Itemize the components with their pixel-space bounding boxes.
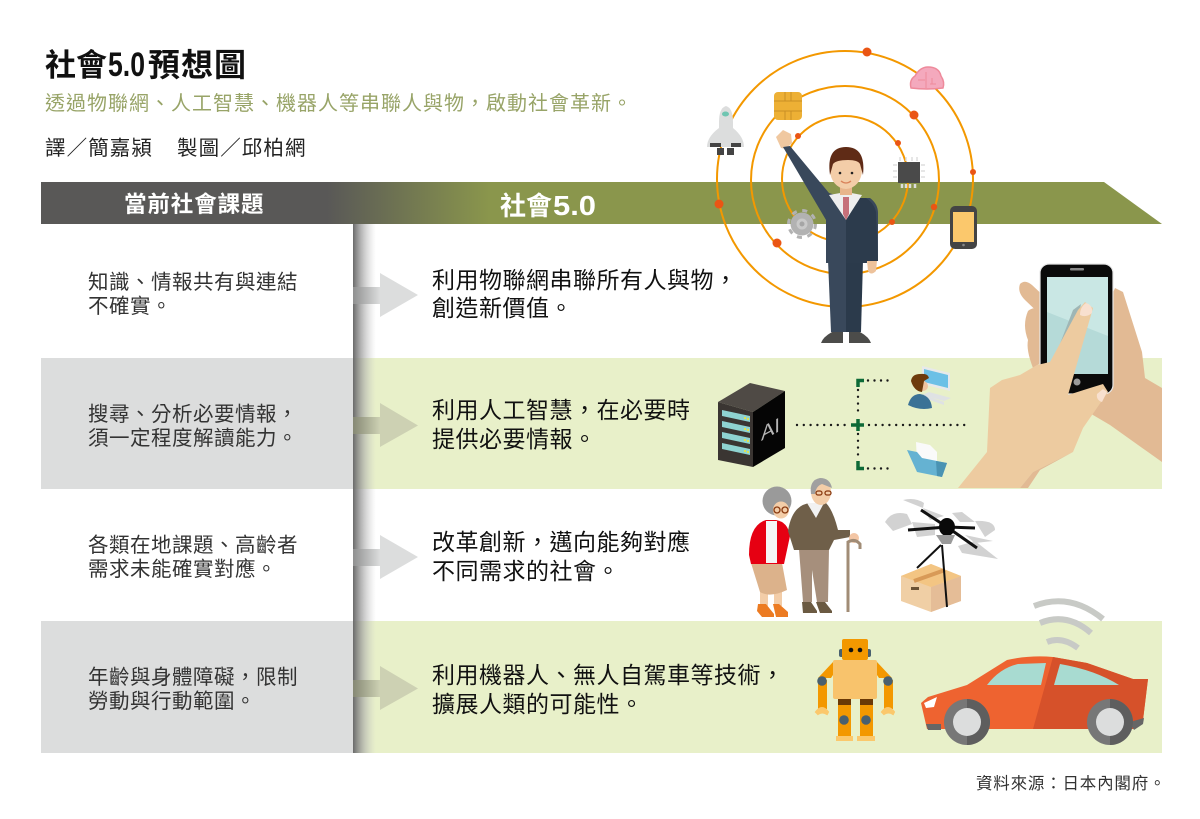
- heading: society 5.0: 社會: [500, 186, 552, 223]
- shirt and tie: [829, 192, 862, 220]
- text: issue 3: 各類在地課題、高齡者: [88, 528, 298, 558]
- robot torso: [833, 660, 877, 699]
- text: solution 2: 提供必要情報。: [432, 420, 596, 454]
- icon: space shuttle: [707, 106, 744, 155]
- icon: processor: [893, 157, 925, 188]
- robot arms: [818, 662, 892, 678]
- panel: row backgrounds: [41, 224, 1162, 753]
- text: issue 3: 需求未能確實對應。: [88, 552, 277, 582]
- woman head: [762, 486, 792, 518]
- credits: 製圖／邱柏網: [177, 131, 307, 161]
- illustration: delivery drone: [885, 499, 998, 612]
- icon: gear: [788, 210, 816, 238]
- label: AI: AI: [761, 413, 780, 446]
- windows: [987, 663, 1046, 685]
- icon: person at computer: [908, 366, 951, 409]
- source note: 資料來源：日本內閣府。: [976, 770, 1166, 794]
- arrow: row 3: [353, 535, 418, 579]
- connector dots: [797, 380, 968, 468]
- text: issue 2: 搜尋、分析必要情報，: [88, 397, 298, 427]
- text: solution 4: 擴展人類的可能性。: [432, 685, 644, 719]
- back fingers: [1019, 282, 1048, 368]
- robot ears: [839, 649, 871, 657]
- finger shadow: [1053, 304, 1081, 362]
- man legs: [799, 549, 829, 602]
- front hand: [958, 302, 1108, 488]
- woman legs: [760, 590, 782, 606]
- title: [45, 40, 247, 86]
- wrist shade: [1020, 452, 1073, 488]
- phone screen: [1047, 277, 1108, 374]
- face: [839, 172, 853, 183]
- arrow: row 2: [353, 403, 418, 447]
- heading: society 5.0: [500, 186, 596, 223]
- neck: [840, 184, 852, 195]
- car body: [921, 656, 1148, 729]
- subtitle: 透過物聯網、人工智慧、機器人等串聯人與物，啟動社會革新。: [45, 87, 633, 116]
- text: solution 1: 利用物聯網串聯所有人與物，: [432, 261, 738, 295]
- icon: smartphone: [950, 206, 977, 249]
- jacket: [783, 146, 878, 263]
- illustration: self-driving car: [921, 656, 1148, 745]
- credits: [45, 131, 307, 161]
- text: issue 4: 勞動與行動範圍。: [88, 684, 256, 714]
- hair: [829, 147, 863, 175]
- robot legs: [838, 699, 851, 736]
- header band: [41, 182, 1162, 224]
- arrow: row 4: [353, 666, 418, 710]
- icon: brain: [910, 67, 944, 89]
- tether: [917, 545, 947, 607]
- arrow: row 1: [353, 273, 418, 317]
- man head: [811, 479, 831, 505]
- text: solution 4: 利用機器人、無人自駕車等技術，: [432, 656, 784, 690]
- shoes: [821, 332, 843, 343]
- woman skirt: [751, 563, 787, 595]
- icon: folder: [907, 442, 947, 477]
- illustration: AI server: [718, 383, 785, 467]
- illustration: businessman: [776, 130, 878, 343]
- back hand: [1068, 288, 1162, 462]
- title: 預想圖: [148, 40, 247, 86]
- illustration: hands holding phone: [958, 264, 1162, 488]
- title: 社會: [45, 40, 107, 85]
- icon: chip card: [774, 92, 802, 120]
- man shoes: [802, 602, 832, 613]
- title: 5.0: [108, 46, 145, 84]
- illustration: elderly couple: [749, 478, 860, 617]
- text: issue 2: 須一定程度解讀能力。: [88, 421, 298, 451]
- rotors: [885, 499, 998, 559]
- text: issue 1: 不確實。: [88, 289, 172, 319]
- raised fist: [776, 130, 792, 149]
- man sweater: [788, 503, 850, 550]
- text: solution 3: 不同需求的社會。: [432, 552, 620, 586]
- heading: current issues: 當前社會課題: [124, 187, 264, 219]
- text: solution 2: 利用人工智慧，在必要時: [432, 391, 690, 425]
- right hand: [867, 261, 877, 274]
- drone arms: [908, 510, 977, 548]
- text: issue 4: 年齡與身體障礙，限制: [88, 660, 298, 690]
- phone body: [1040, 264, 1113, 394]
- icon: wifi signal: [1034, 601, 1103, 648]
- robot head: [842, 639, 868, 660]
- woman torso: [749, 520, 790, 564]
- legs: [828, 260, 846, 332]
- text: solution 1: 創造新價值。: [432, 289, 573, 323]
- drone body: [939, 518, 955, 536]
- illustration: robot: [816, 639, 894, 741]
- woman shoes: [757, 604, 788, 617]
- wheels: [944, 699, 1133, 745]
- headlight: [924, 697, 937, 708]
- heading: society 5.0: 5.0: [553, 190, 596, 221]
- parcel: [901, 564, 961, 612]
- text: issue 1: 知識、情報共有與連結: [88, 265, 298, 295]
- head: [830, 151, 862, 189]
- text: solution 3: 改革創新，邁向能夠對應: [432, 523, 690, 557]
- cane: [848, 540, 860, 612]
- orbit diagram: [714, 48, 976, 307]
- credits: 譯／簡嘉潁: [45, 131, 153, 161]
